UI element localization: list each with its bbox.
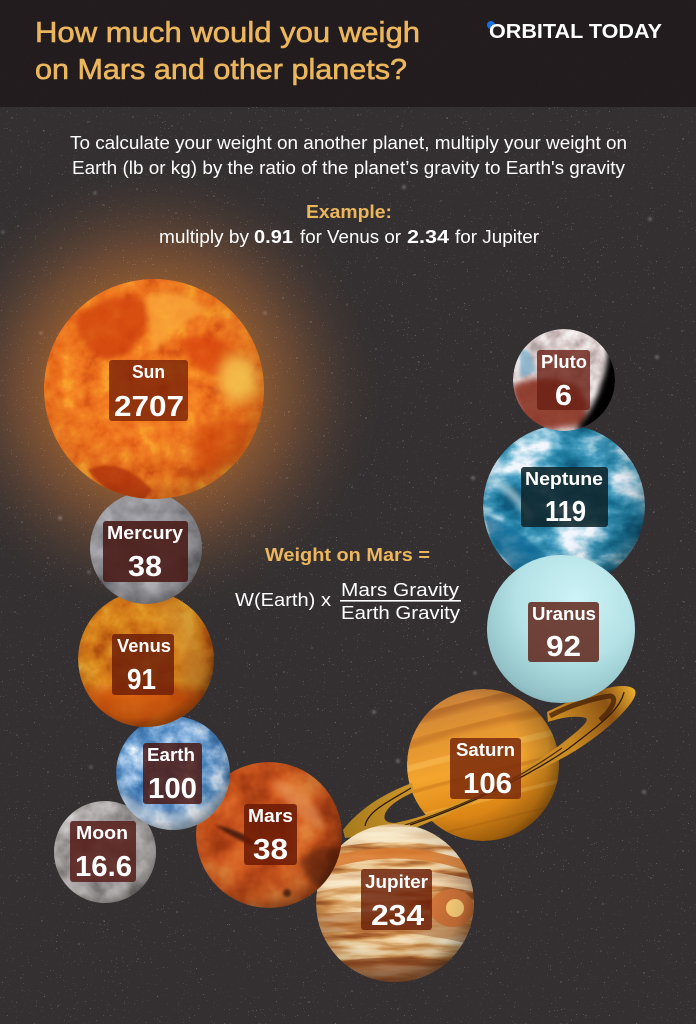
icon: blue dot [487, 21, 495, 29]
example text: for Venus or [300, 227, 401, 247]
sphere: Neptune [483, 428, 645, 573]
intro text [70, 133, 627, 178]
planet: Jupiter [316, 824, 474, 985]
example text [159, 202, 539, 247]
label: Uranus 92: Uranus [532, 604, 596, 624]
sphere: Earth [116, 716, 230, 835]
title: on Mars and other planets? [35, 54, 407, 86]
label: Uranus 92 [528, 602, 599, 663]
label: Uranus 92: 92 [546, 631, 581, 663]
example text: Example: [306, 202, 392, 222]
label: Mercury 38: Mercury [107, 523, 183, 543]
planet: Moon [54, 801, 156, 903]
title [35, 17, 420, 86]
logo: Orbital Today: ORBITAL TODAY [489, 21, 663, 43]
example text: for Jupiter [455, 227, 539, 247]
label: Venus 91: 91 [127, 664, 156, 696]
formula: weight on Mars [235, 545, 461, 623]
label: Neptune 119: Neptune [525, 469, 603, 489]
formula: weight on Mars: W(Earth) x [235, 590, 331, 610]
example text: multiply by [159, 227, 249, 247]
title: How much would you weigh [35, 17, 420, 49]
label: Earth 100: 100 [148, 773, 197, 805]
planet: Pluto [513, 329, 625, 432]
header band [0, 0, 696, 107]
label: Earth 100 [143, 743, 202, 805]
ring: Saturn [343, 686, 636, 838]
label: Venus 91 [112, 634, 174, 696]
planet: Uranus [487, 555, 635, 703]
intro text: Earth (lb or kg) by the ratio of the planet’s gravity to Earth's gravity [72, 158, 625, 178]
label: Neptune 119 [521, 467, 608, 528]
planet: Sun [44, 279, 264, 505]
label: Saturn 106: 106 [463, 768, 512, 800]
planet: Earth [116, 716, 230, 835]
sphere: Pluto [513, 329, 625, 432]
label: Saturn 106: Saturn [456, 740, 515, 760]
formula: weight on Mars: Mars Gravity [341, 580, 459, 600]
label: Mercury 38 [103, 521, 188, 583]
sphere: Jupiter [316, 824, 474, 985]
formula: weight on Mars: Earth Gravity [341, 603, 460, 623]
planet: Venus [78, 591, 214, 730]
label: Jupiter 234: Jupiter [365, 872, 428, 892]
label: Mercury 38: 38 [128, 551, 162, 583]
label: Mars 38 [244, 804, 297, 866]
label: Mars 38: Mars [248, 806, 293, 826]
planet: Mercury [90, 492, 202, 604]
label: Saturn 106 [450, 738, 521, 800]
sphere: Saturn [407, 689, 559, 841]
label: Pluto 6: 6 [555, 380, 572, 412]
label: Sun 2707 [109, 360, 188, 423]
label: Jupiter 234: 234 [371, 900, 424, 932]
label: Venus 91: Venus [117, 636, 171, 656]
planet: Saturn [343, 683, 636, 841]
label: Earth 100: Earth [147, 745, 195, 765]
label: Jupiter 234 [361, 869, 432, 932]
label: Mars 38: 38 [253, 834, 288, 866]
example text: 2.34 [407, 227, 449, 247]
sphere: Venus [78, 591, 214, 730]
label: Moon 16.6 [70, 821, 136, 883]
sphere: Sun [44, 279, 264, 505]
sphere: Mars [196, 762, 342, 908]
formula: weight on Mars: Weight on Mars = [265, 545, 430, 565]
label: Pluto 6: Pluto [541, 352, 587, 372]
label: Sun 2707: Sun [132, 362, 165, 382]
planet: Neptune [483, 428, 645, 573]
label: Moon 16.6: 16.6 [75, 851, 132, 883]
label: Moon 16.6: Moon [76, 823, 128, 843]
example text: 0.91 [254, 227, 293, 247]
label: Neptune 119: 119 [545, 496, 586, 528]
label: Sun 2707: 2707 [114, 391, 184, 423]
planet: Mars [196, 762, 342, 908]
intro text: To calculate your weight on another planet, multiply your weight on [70, 133, 627, 153]
label: Pluto 6 [537, 350, 590, 412]
